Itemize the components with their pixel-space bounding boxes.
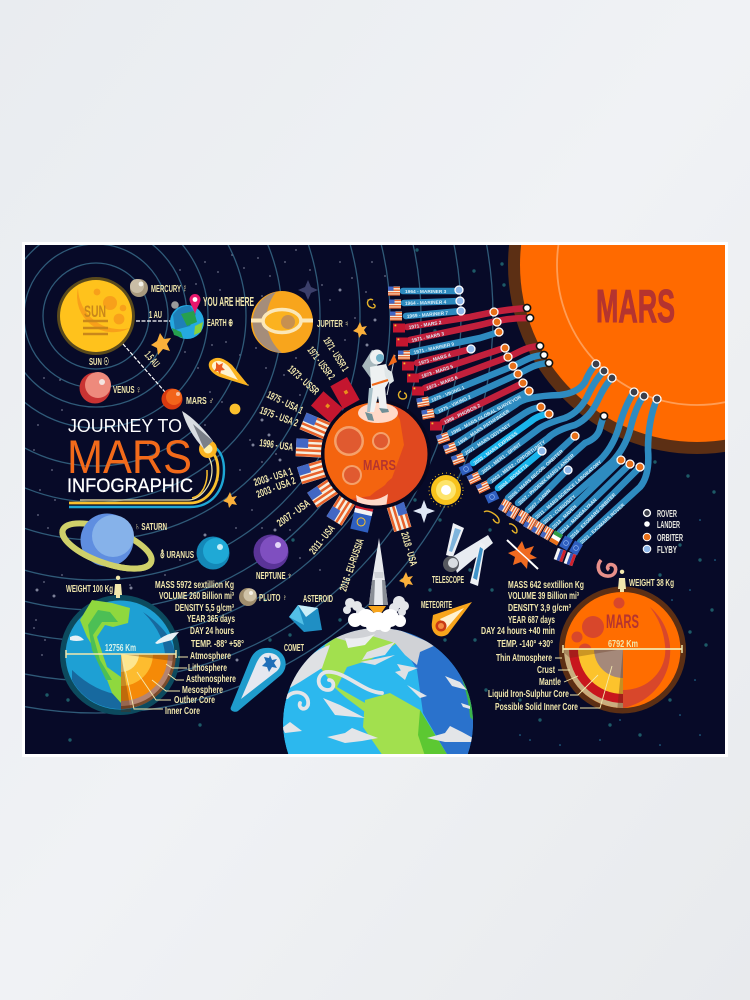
ribbon labels: 1973 - MARS 5 (421, 364, 454, 380)
ribbon labels: 2021 - EXOMARS ROVER (579, 502, 627, 545)
ribbon labels: 2005 - MARS RECON. ORBITER (507, 449, 565, 501)
distance line 1.5 AU (123, 344, 165, 392)
mars statistics (481, 577, 674, 713)
mars cross-section: 6792 Km (608, 638, 638, 650)
dark four-point star (298, 280, 318, 300)
white four-point star (413, 500, 435, 523)
earth statistics (66, 579, 244, 717)
mars statistics: Thin Atmosphere (496, 652, 552, 664)
comet lower: COMET (284, 642, 304, 654)
big Mars (508, 245, 725, 454)
asteroid (289, 593, 333, 632)
year labels: 1975 - USA 2 (258, 405, 300, 430)
year labels: 2018 - USA (398, 531, 419, 568)
earth statistics: VOLUME 260 Billion mi³ (159, 590, 234, 602)
year labels (252, 335, 419, 593)
orbit rings (25, 245, 494, 714)
ribbon labels: 1971 - MARS 3 (411, 331, 445, 344)
title: JOURNEY TO (68, 416, 182, 436)
earth statistics: TEMP. -88° +58° (191, 638, 244, 650)
central Mars: MARS (363, 457, 396, 474)
mars statistics: Liquid Iron-Sulphur Core (488, 688, 569, 700)
ribbon labels: 2016 - EXOMARS ORBITER (569, 492, 618, 540)
meteorite: METEORITE (421, 599, 452, 611)
poster white border (22, 242, 728, 757)
planet: mercury (130, 279, 187, 297)
telescope (432, 523, 493, 586)
earth statistics: Inner Core (165, 705, 200, 717)
earth statistics: MASS 5972 sextillion Kg (155, 579, 234, 591)
rocket launch (343, 538, 409, 632)
ribbon labels: 2003 - MER1 - SPIRIT (481, 442, 523, 476)
legend (643, 508, 683, 556)
year labels: 1996 - USA (259, 437, 294, 454)
year labels: 1973 - USSR (285, 363, 321, 398)
ribbon labels: 2003 - MARS EXPRESS (473, 430, 520, 467)
earth statistics: DENSITY 5,5 g/cm³ (175, 602, 234, 614)
earth statistics: YEAR 365 days (187, 613, 235, 625)
ribbon labels: 1975 - VIKING 2 (437, 394, 472, 415)
mars statistics: VOLUME 39 Billion mi³ (508, 590, 579, 602)
year labels: 2003 - USA 1 (252, 466, 294, 489)
title (68, 419, 192, 492)
ribbon labels: 2011 - MARS SCIENCE LABORATORY (534, 459, 604, 521)
small yellow moon (230, 404, 240, 414)
ribbon labels: 1973 - MARS 4 (418, 352, 452, 367)
mars statistics: MASS 642 sextillion Kg (508, 579, 584, 591)
ribbon labels: 1996 - MARS GLOBAL SURVEYOR (450, 394, 523, 437)
planet: earth small with pin: YOU ARE HERE (203, 294, 254, 309)
year labels: 1971 - USSR 1 (320, 335, 351, 374)
distance line 1 AU (136, 311, 170, 322)
earth statistics: Lithosphere (188, 662, 227, 674)
legend: FLYBY (657, 544, 677, 556)
earth statistics: WEIGHT 100 Kg (66, 583, 113, 595)
astronaut (362, 350, 397, 421)
planet: venus: VENUS ♀ (113, 384, 141, 396)
meteorite (421, 599, 472, 636)
mars statistics: DAY 24 hours +40 min (481, 625, 555, 637)
pink swirl (598, 560, 616, 576)
ribbon labels: 2001 - MARS ODYSSEY (464, 422, 513, 457)
distance line 1 AU: 1 AU (149, 309, 162, 321)
earth statistics: Atmosphere (190, 650, 231, 662)
ribbon labels: 2004 - ROSETTA (497, 462, 530, 492)
ribbon labels: 1964 - MARINER 3 (405, 289, 447, 295)
galaxy (429, 473, 463, 507)
ribbon labels: 1975 - VIKING 1 (431, 385, 466, 404)
ribbon labels: 1996 - MARS PATHFINDER (457, 408, 511, 447)
planet: saturn: ♄ SATURN (135, 521, 167, 533)
year labels: 1971 - USSR 2 (305, 345, 337, 382)
earth statistics: Mesosphere (182, 684, 223, 696)
planet: mars small (162, 388, 214, 410)
planet: uranus (160, 536, 230, 570)
mars statistics: TEMP. -140° +30° (497, 638, 553, 650)
exploding comet (507, 540, 538, 569)
star decorations (151, 322, 413, 588)
legend: ROVER (657, 508, 677, 520)
mars statistics: YEAR 687 days (508, 614, 555, 626)
mars statistics: Possible Solid Inner Core (495, 701, 578, 713)
planet: mercury: MERCURY ☿ (151, 283, 187, 295)
comet top (209, 358, 249, 386)
ribbon labels: 2013 - MAVEN (551, 504, 579, 530)
mission ribbons (403, 286, 661, 545)
icon: human figure earth (114, 576, 122, 598)
earth statistics: Outher Core (174, 694, 215, 706)
mars statistics: WEIGHT 38 Kg (629, 577, 674, 589)
fan of flags around Mars (296, 377, 411, 533)
planet: earth small with pin: EARTH ⊕ (207, 317, 233, 329)
planet: jupiter (251, 291, 349, 353)
telescope: TELESCOPE (432, 574, 464, 586)
planet: mars small: MARS ♂ (186, 395, 214, 407)
planet: sun (57, 277, 135, 355)
planet: venus (80, 372, 141, 404)
legend: ORBITER (657, 532, 683, 544)
asteroid: ASTEROID (303, 593, 333, 605)
central Mars (321, 399, 431, 509)
ribbon labels: 2007 - PHOENIX MARS LANDER (517, 453, 576, 506)
big Mars title: MARS (596, 280, 675, 332)
earth statistics: Asthenosphere (186, 673, 236, 685)
year labels: 2003 - USA 2 (255, 475, 297, 501)
title: MARS (67, 430, 192, 483)
swirl glyphs (367, 299, 517, 533)
planet: uranus: ⛢ URANUS (160, 548, 194, 561)
ribbon labels: 1969 - MARINER 7 (407, 310, 449, 320)
rainbow trail and rocket (69, 411, 224, 507)
label: sun: SUN ☉ (89, 356, 109, 368)
planet: earth small with pin (170, 294, 254, 339)
planet: pluto (239, 588, 287, 606)
comet lower (231, 642, 304, 712)
ribbon labels: 1973 - MARS 6 (426, 375, 459, 392)
ribbon labels: 1964 - MARINER 4 (405, 300, 447, 307)
mars statistics: DENSITY 3,9 g/cm³ (508, 602, 571, 614)
planet: saturn (59, 514, 167, 572)
ribbon labels: 2012 - CURIOSITY (542, 494, 578, 526)
planet: jupiter: JUPITER ♃ (317, 318, 349, 330)
mission flags (388, 286, 583, 566)
earth statistics: DAY 24 hours (190, 625, 234, 637)
ribbon labels: 2007 - DAWN (527, 488, 553, 513)
ribbon labels: 2003 - MER2 - OPPORTUNITY (490, 439, 547, 485)
year labels: 2011 - USA (307, 523, 338, 557)
star field (34, 250, 715, 745)
mars statistics: Mantle (539, 676, 561, 688)
planet: sun: SUN (84, 302, 106, 321)
mars cross-section (555, 570, 686, 714)
mars cross-section: MARS (606, 612, 639, 633)
earth cross-section: 12756 Km (105, 642, 136, 654)
planet: pluto: PLUTO ♇ (259, 592, 287, 604)
earth cross-section (60, 576, 188, 715)
ribbon labels: 1988 - PHOBOS 2 (443, 403, 482, 426)
mars statistics: Crust (537, 664, 555, 676)
distance line 1.5 AU: 1.5 AU (142, 349, 162, 370)
ribbon labels (405, 289, 627, 545)
big earth (282, 625, 480, 818)
planet: neptune: NEPTUNE ♆ (256, 570, 292, 582)
year labels: 1975 - USA 1 (265, 389, 305, 417)
ribbon labels: 1971 - MARINER 9 (413, 341, 455, 356)
year labels: 2007 - USA (275, 497, 313, 529)
planet: neptune (254, 534, 292, 582)
ribbon labels: 1971 - MARS 2 (408, 320, 442, 331)
ribbon end markers (455, 286, 661, 474)
icon: human figure mars (618, 570, 626, 592)
year labels: 2016 - EU-RUSSIA (337, 537, 367, 593)
title: INFOGRAPHIC (67, 476, 193, 497)
legend: LANDER (657, 519, 680, 531)
ribbon labels: 2014 - MANGALYAAN (559, 497, 599, 535)
poster panel (25, 245, 725, 754)
